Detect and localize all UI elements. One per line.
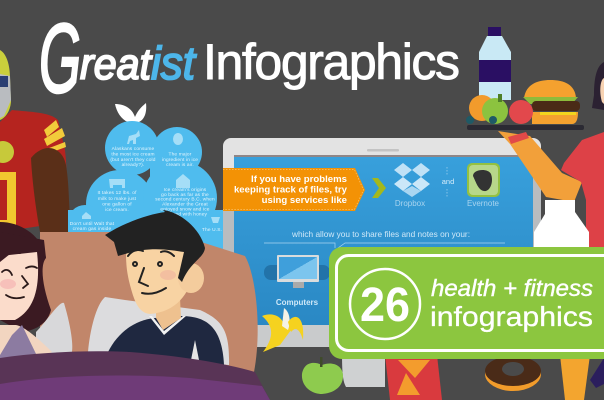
bracket lines (264, 243, 505, 248)
badge heading: health + fitness (431, 275, 594, 301)
cloud text: ice cream. (105, 207, 129, 213)
icon: green chevron (372, 178, 386, 198)
orange leg (560, 355, 590, 400)
server torso (561, 132, 604, 247)
pillow right (88, 297, 229, 365)
milk bottle (534, 200, 589, 247)
man (105, 210, 224, 365)
illustration: items below the banner (302, 355, 604, 400)
panel: ice cream infographic cloud (68, 103, 223, 250)
tablet screen (234, 155, 533, 325)
illustration: couple in bed (0, 210, 270, 400)
callout: orange banner: If you have problems (251, 174, 347, 185)
pillow left (36, 303, 72, 360)
title: Greatist Infographics: G (39, 3, 81, 113)
woman shoulder and top (0, 325, 52, 358)
title: Greatist Infographics: ist (151, 37, 197, 89)
callout: orange banner (223, 168, 365, 211)
icon: Dropbox: Dropbox (395, 199, 425, 208)
dark sneaker (590, 358, 604, 388)
cloud text: Ice cream's origins (164, 187, 207, 193)
cloud text: Alexander the Great (162, 202, 208, 208)
headboard (40, 232, 258, 372)
fruit (466, 94, 533, 124)
chips bag (385, 355, 442, 400)
cloud text: Alaskans consume (112, 146, 155, 152)
icon: Evernote: Evernote (467, 199, 500, 208)
text: Computers: Computers (276, 298, 319, 307)
cloud text: flavored with honey (163, 212, 208, 218)
illustration: football player (0, 50, 72, 232)
cloud text: cream is air. (166, 162, 194, 168)
callout: orange banner: using services like (262, 195, 347, 206)
woman face (0, 252, 38, 320)
monitor icon (264, 255, 330, 288)
cloud text: ingredient in ice (162, 157, 198, 163)
woman (0, 222, 52, 360)
cloud shape (68, 121, 223, 250)
cloud text: The major (169, 152, 192, 158)
man hair (105, 210, 205, 282)
illustration: food tray and server (466, 27, 604, 247)
cloud text: The U.S. (202, 227, 222, 233)
cloud text (70, 146, 222, 233)
illustration: tablet (223, 138, 541, 387)
text: sharing line: which allow you to share files and notes on your: (291, 230, 470, 239)
man neck (156, 298, 181, 330)
badge circle with number (350, 269, 420, 339)
blanket (0, 351, 270, 400)
burger (523, 80, 580, 124)
server hair and face (592, 62, 604, 110)
woman fringe (0, 232, 46, 262)
cloud text: (but aren't they cold (110, 157, 156, 163)
badge circle with number: 26 (360, 279, 410, 332)
badge subheading: infographics (430, 301, 593, 332)
server arm (498, 131, 582, 202)
icon: white leaves (115, 103, 146, 123)
man sweater (108, 316, 224, 365)
icon: banana (262, 308, 303, 352)
donut (485, 356, 541, 391)
cloud text: Don't until Walt that (70, 221, 115, 227)
cloud text: It takes 12 lbs. of (97, 190, 137, 196)
divider (446, 167, 448, 197)
man eyes and mouth (128, 250, 174, 294)
cloud text: second century B.C. when (155, 196, 215, 202)
tray (467, 125, 584, 130)
woman hair (0, 222, 51, 332)
callout: orange banner: keeping track of files, try (234, 184, 348, 196)
cloud text: cream gas inside (73, 226, 112, 232)
icon: Dropbox (394, 163, 430, 208)
woman facial features (2, 266, 37, 298)
green apple (302, 357, 343, 394)
title: Greatist Infographics: Infographics (203, 34, 460, 90)
badge: 26 health + fitness infographics (329, 247, 604, 359)
monitor stand (342, 345, 385, 387)
man face (126, 240, 194, 314)
cloud text: enjoyed snow and ice (160, 206, 210, 212)
title: Greatist Infographics (39, 3, 460, 113)
cloud text: the most ice cream (111, 152, 155, 158)
cloud text: milk to make just (98, 196, 137, 202)
text: and: and (442, 177, 454, 186)
cloud text: one gallon of (102, 202, 132, 208)
icon: small cloud pictograms (82, 130, 220, 223)
man ear (178, 263, 204, 293)
cloud text: already?). (122, 162, 144, 168)
water bottle (479, 27, 511, 100)
icon: Evernote (467, 163, 500, 208)
title: Greatist Infographics: reat (80, 40, 153, 89)
cloud text: go back as far as the (161, 192, 209, 198)
